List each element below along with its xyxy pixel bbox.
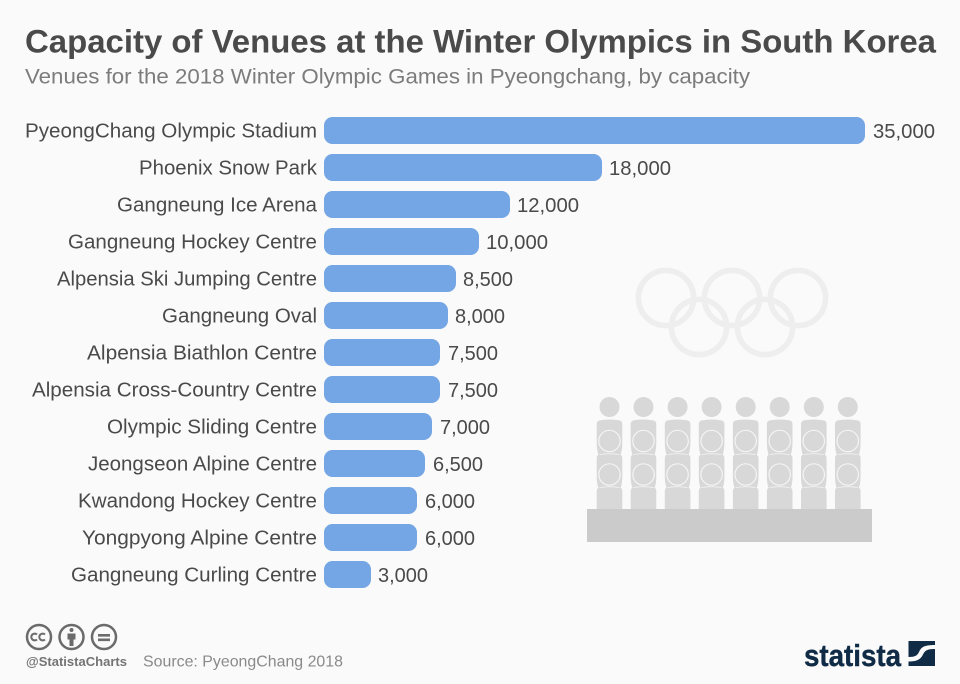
row: Alpensia Biathlon Centre — [87, 339, 498, 366]
row: Gangneung Curling Centre: 3,000 — [378, 565, 428, 587]
row: Gangneung Oval: 8,000 — [455, 306, 505, 328]
row: Kwandong Hockey Centre: 6,000 — [425, 491, 475, 513]
icon: creative commons licence — [27, 625, 116, 649]
row: Yongpyong Alpine Centre — [82, 524, 475, 551]
row: Alpensia Ski Jumping Centre: 8,500 — [463, 269, 513, 291]
row: Phoenix Snow Park: Phoenix Snow Park — [139, 158, 318, 180]
row: Gangneung Ice Arena — [117, 191, 579, 218]
title: Capacity of Venues at the Winter Olympics in South Korea — [25, 24, 936, 60]
icon: olympic rings — [638, 270, 826, 355]
row: Gangneung Hockey Centre: 10,000 — [486, 232, 548, 254]
row: Gangneung Oval: Gangneung Oval — [162, 306, 317, 328]
row: Jeongseon Alpine Centre: Jeongseon Alpine Centre — [88, 454, 317, 476]
row: Alpensia Cross-Country Centre: Alpensia Cross-Country Centre — [32, 380, 317, 402]
row: Gangneung Hockey Centre — [68, 228, 548, 255]
credit handle: @StatistaCharts — [26, 654, 127, 669]
row: Phoenix Snow Park: 18,000 — [609, 158, 671, 180]
row: Kwandong Hockey Centre — [78, 487, 475, 514]
subtitle: Venues for the 2018 Winter Olympic Games in Pyeongchang, by capacity — [25, 66, 751, 88]
row: Gangneung Curling Centre: Gangneung Curling Centre — [71, 564, 317, 586]
row: Alpensia Cross-Country Centre — [32, 376, 498, 403]
row: Kwandong Hockey Centre: Kwandong Hockey Centre — [78, 490, 317, 512]
row: PyeongChang Olympic Stadium: PyeongChang Olympic Stadium — [25, 120, 317, 142]
row: Jeongseon Alpine Centre — [88, 450, 483, 477]
row: Alpensia Biathlon Centre: 7,500 — [448, 343, 498, 365]
row: Phoenix Snow Park — [139, 154, 671, 181]
icon: spectators in a stand — [587, 397, 872, 542]
row: Olympic Sliding Centre: Olympic Sliding Centre — [107, 416, 317, 438]
row: Gangneung Oval — [162, 302, 505, 329]
row: Alpensia Cross-Country Centre: 7,500 — [448, 380, 498, 402]
source: Source: PyeongChang 2018 — [143, 654, 343, 670]
row: Alpensia Ski Jumping Centre — [57, 265, 513, 292]
row: Olympic Sliding Centre: 7,000 — [440, 417, 490, 439]
row: Yongpyong Alpine Centre: 6,000 — [425, 528, 475, 550]
bar chart — [25, 117, 935, 588]
row: Gangneung Hockey Centre: Gangneung Hockey Centre — [68, 232, 317, 254]
row: Yongpyong Alpine Centre: Yongpyong Alpine Centre — [82, 528, 317, 550]
row: Olympic Sliding Centre — [107, 413, 490, 440]
row: Alpensia Ski Jumping Centre: Alpensia Ski Jumping Centre — [57, 268, 317, 290]
statista logo: statista — [804, 638, 902, 673]
row: Gangneung Ice Arena: 12,000 — [517, 195, 579, 217]
row: Jeongseon Alpine Centre: 6,500 — [433, 454, 483, 476]
row: Gangneung Curling Centre — [71, 561, 428, 588]
row: PyeongChang Olympic Stadium: 35,000 — [873, 121, 935, 143]
row: PyeongChang Olympic Stadium — [25, 117, 935, 144]
row: Gangneung Ice Arena: Gangneung Ice Arena — [117, 194, 318, 216]
row: Alpensia Biathlon Centre: Alpensia Biathlon Centre — [87, 342, 317, 364]
